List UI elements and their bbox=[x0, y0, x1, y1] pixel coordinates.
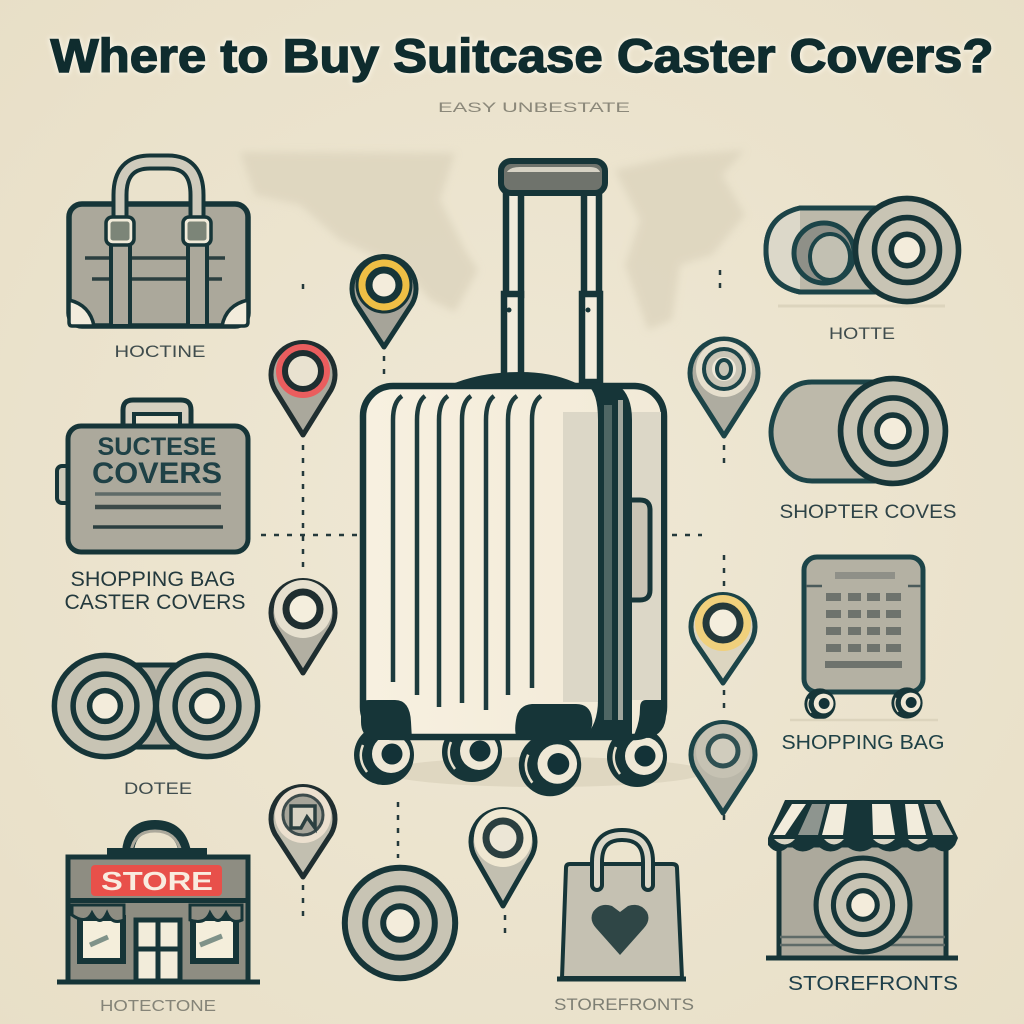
icon: shopping bag heart bbox=[557, 835, 686, 979]
icon: double roller bbox=[54, 655, 258, 757]
suitcase bbox=[354, 161, 705, 796]
shadow bbox=[790, 719, 938, 721]
label: CASTER COVERS bbox=[64, 591, 246, 614]
icon: store: STORE bbox=[101, 866, 213, 896]
pin yellow bbox=[352, 257, 416, 347]
label: SHOPPING BAG bbox=[70, 568, 236, 591]
pin right yellow bbox=[691, 595, 755, 683]
background world map bbox=[240, 150, 745, 330]
pin bag bbox=[271, 787, 335, 877]
suitcase handle bbox=[501, 161, 605, 382]
label: STOREFRONTS bbox=[788, 973, 958, 995]
side handle bbox=[632, 500, 650, 600]
icon: covers case bbox=[57, 400, 248, 552]
label: STOREFRONTS bbox=[554, 995, 694, 1014]
pin red bbox=[271, 343, 335, 435]
icon: roller mid right bbox=[771, 379, 945, 483]
label: HOCTINE bbox=[114, 342, 206, 361]
corner guards bbox=[361, 700, 666, 740]
suitcase body bbox=[363, 386, 664, 737]
subtitle: EASY UNBESTATE bbox=[438, 99, 630, 115]
label: HOTTE bbox=[829, 324, 895, 343]
pin right lower bbox=[691, 723, 755, 813]
shadow bbox=[778, 304, 945, 308]
pin neutral bbox=[271, 580, 335, 673]
title: Where to Buy Suitcase Caster Covers? bbox=[50, 29, 993, 82]
icon: storefront bbox=[766, 800, 958, 958]
icon: roller top right bbox=[766, 198, 959, 302]
dotted connector lines bbox=[261, 270, 724, 938]
title: Where to Buy Suitcase Caster Covers? bbox=[50, 29, 993, 82]
icon: handbag top left bbox=[69, 162, 248, 326]
label: DOTEE bbox=[124, 779, 192, 798]
suitcase side panels bbox=[563, 385, 661, 737]
shop windows and awnings bbox=[80, 918, 123, 961]
icon: covers case: COVERS bbox=[92, 457, 222, 490]
icon: covers case: SUCTESE bbox=[98, 433, 216, 461]
icon: target roller bbox=[345, 868, 455, 978]
door bbox=[136, 920, 180, 981]
suitcase ribs bbox=[393, 396, 541, 710]
pin bottom bbox=[471, 809, 535, 906]
label: SHOPTER COVES bbox=[780, 502, 956, 523]
map pins bbox=[271, 257, 758, 906]
label: HOTECTONE bbox=[100, 998, 216, 1015]
label: SHOPPING BAG bbox=[782, 732, 944, 754]
icon: small case bbox=[804, 557, 923, 720]
pin right top bbox=[690, 339, 758, 436]
suitcase wheels bbox=[354, 722, 667, 796]
label bbox=[64, 568, 246, 614]
suitcase shadow bbox=[385, 757, 705, 787]
icon: store bbox=[57, 826, 260, 982]
